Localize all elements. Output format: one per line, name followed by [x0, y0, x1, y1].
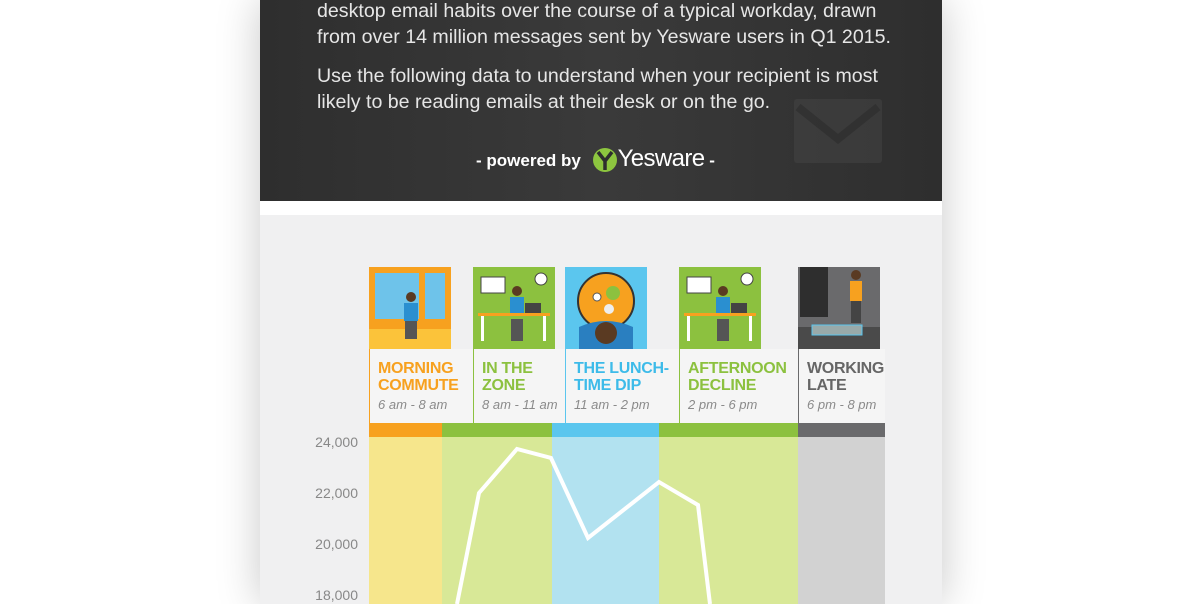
label: TIME DIP [574, 377, 641, 394]
text: 24,000 [315, 434, 358, 450]
label: ZONE [482, 377, 525, 394]
label [369, 349, 473, 423]
chart: email activity by time of day [369, 423, 885, 604]
text block: intro: desktop email habits over the course of a typical workday, drawn from over 14 million messages sent by Yesware users in Q1 2015. [317, 0, 891, 48]
label: 6 am - 8 am [378, 397, 447, 412]
label: MORNING [378, 360, 453, 377]
divider strip [260, 201, 942, 215]
text: 22,000 [315, 485, 358, 501]
icon: envelope [794, 99, 882, 163]
panel: morning commute [369, 267, 459, 423]
text: 18,000 [315, 587, 358, 603]
icon: desk worker [473, 267, 555, 349]
icon: train commuter [369, 267, 451, 349]
label [565, 349, 679, 423]
label: 6 pm - 8 pm [807, 397, 876, 412]
label: COMMUTE [378, 377, 459, 394]
icon: lunch table [565, 267, 647, 349]
label: 8 am - 11 am [482, 397, 558, 412]
icon: desk worker afternoon [679, 267, 761, 349]
text: 20,000 [315, 536, 358, 552]
label: THE LUNCH- [574, 360, 669, 377]
label: DECLINE [688, 377, 756, 394]
label: IN THE [482, 360, 533, 377]
panel: afternoon decline [679, 267, 787, 423]
panel: in the zone [473, 267, 558, 423]
chart background bands [369, 423, 885, 604]
panel: infographic card [260, 0, 942, 604]
panel: dark header [260, 0, 942, 201]
label [798, 349, 885, 423]
label: 2 pm - 6 pm [688, 397, 757, 412]
text block: intro: Use the following data to understand when your recipient is most likely to be reading emails at their desk or on the go. [317, 65, 878, 112]
label: AFTERNOON [688, 360, 787, 377]
label [473, 349, 565, 423]
label: WORKING [807, 360, 884, 377]
label: LATE [807, 377, 846, 394]
y-axis labels [315, 434, 358, 603]
panel: working late [798, 267, 884, 423]
logo: powered by Yesware: - powered by Yesware - [476, 145, 715, 172]
panel: lunch-time dip [565, 267, 669, 423]
text block: intro [317, 0, 891, 112]
label [679, 349, 798, 423]
line [457, 449, 710, 604]
label: 11 am - 2 pm [574, 397, 650, 412]
icon: treadmill desk [798, 267, 880, 349]
